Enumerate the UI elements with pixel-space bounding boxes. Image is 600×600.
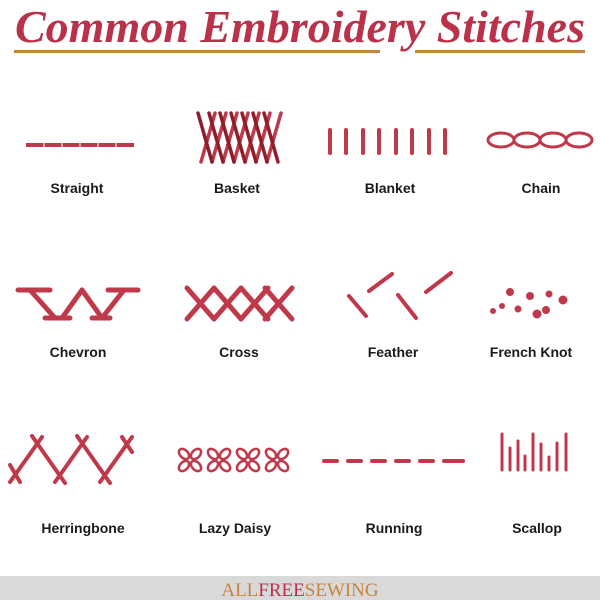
icon: chain: [488, 133, 592, 147]
labels: [41, 180, 573, 536]
title: Common Embroidery Stitches: [15, 2, 585, 52]
footer: [0, 576, 600, 600]
icon: scallop: [502, 434, 566, 470]
labels: Herringbone: [41, 520, 125, 536]
labels: Basket: [214, 180, 260, 196]
icon: herringbone: [10, 436, 132, 483]
icon: chevron: [18, 290, 138, 318]
labels: Feather: [368, 344, 419, 360]
icon: basket: [198, 113, 281, 162]
icon: feather: [349, 273, 451, 318]
icon: lazy daisy: [177, 447, 290, 473]
labels: Lazy Daisy: [199, 520, 271, 536]
icon: french knot: [490, 288, 568, 318]
icon: running: [324, 459, 463, 463]
labels: Straight: [51, 180, 104, 196]
labels: Scallop: [512, 520, 562, 536]
labels: Running: [366, 520, 422, 536]
labels: Chevron: [50, 344, 106, 360]
labels: French Knot: [490, 344, 573, 360]
icon: straight: [26, 143, 134, 147]
icon: blanket: [330, 130, 445, 153]
labels: Chain: [522, 180, 560, 196]
labels: Cross: [219, 344, 259, 360]
labels: Blanket: [365, 180, 416, 196]
icon: cross: [187, 288, 292, 319]
